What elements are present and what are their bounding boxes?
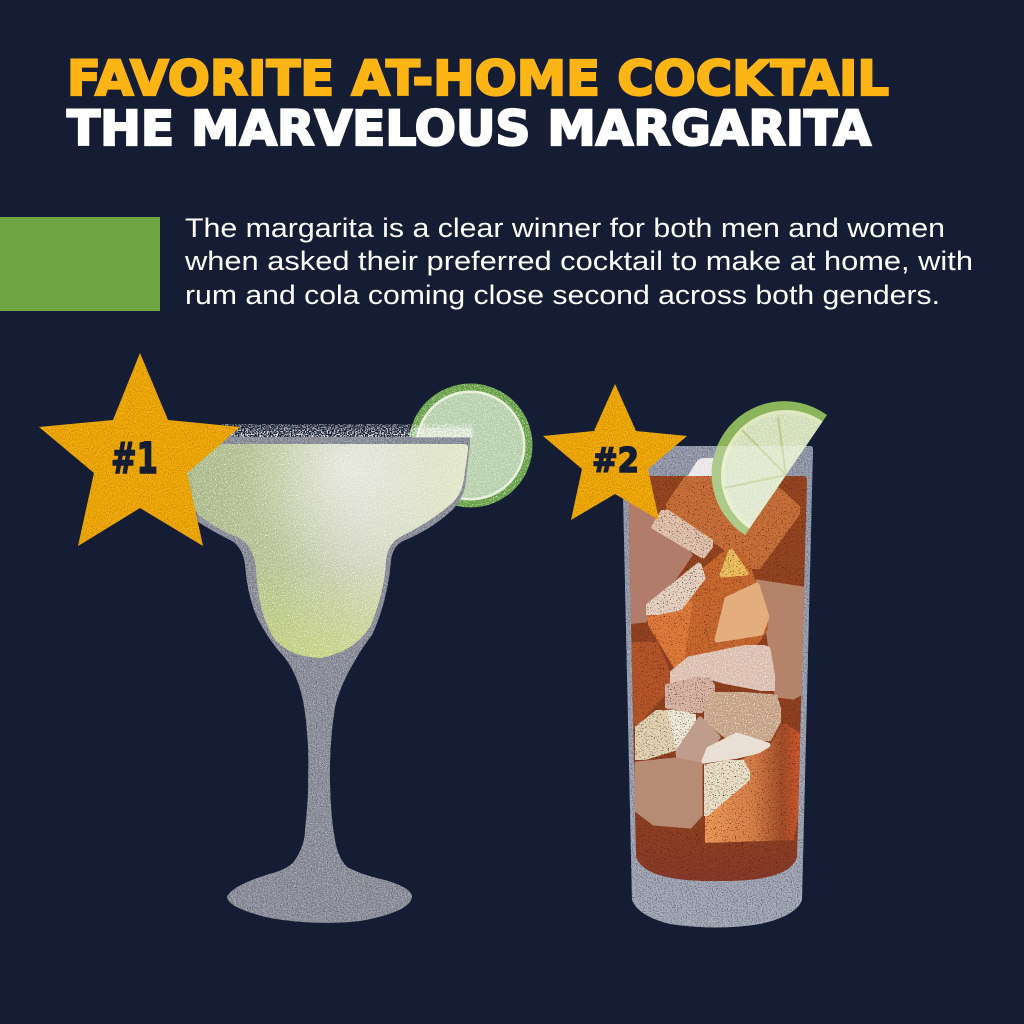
- lime wheel: [408, 384, 532, 508]
- pink left zone: [625, 500, 690, 622]
- green accent block: [0, 217, 160, 311]
- star badge #2: [543, 384, 687, 520]
- intro text: rum and cola coming close second across both genders.: [185, 280, 940, 310]
- star badge #1: #1: [111, 434, 158, 484]
- ice cap above liquid: [687, 458, 722, 477]
- upper pale cluster: [670, 645, 775, 691]
- lower cream cube: [704, 760, 750, 816]
- orange lower block: [705, 722, 801, 843]
- mid right brown: [757, 582, 810, 697]
- top orange ice: [666, 476, 800, 569]
- link cube: [678, 719, 718, 763]
- title: [67, 51, 889, 157]
- margarita illustration: [186, 384, 532, 923]
- salt rim: [222, 424, 472, 437]
- pale ice top-left: [646, 510, 713, 615]
- title line 2: THE MARVELOUS MARGARITA: [67, 101, 871, 157]
- intro text: when asked their preferred cocktail to make at home, with: [184, 246, 973, 276]
- intro text: [184, 213, 973, 310]
- tan cube: [704, 692, 781, 741]
- dark orange left: [631, 642, 670, 728]
- star badge #2: #2: [592, 441, 639, 481]
- cola base: [628, 476, 807, 881]
- bright white facet: [704, 735, 768, 761]
- central orange ice: [648, 549, 768, 673]
- peach highlight: [717, 585, 767, 640]
- cream cube: [635, 710, 696, 760]
- cola glass illustration: [623, 401, 827, 928]
- star badge #1: [39, 353, 240, 546]
- lime wedge: [712, 401, 827, 535]
- margarita liquid: [186, 444, 468, 658]
- bottom left brown block: [637, 760, 700, 826]
- speckled cube: [665, 677, 715, 713]
- glass body and stem: [190, 437, 470, 923]
- title line 1: FAVORITE AT-HOME COCKTAIL: [67, 51, 889, 107]
- salt over lime: [412, 428, 474, 438]
- rum and cola liquid with ice: [628, 476, 807, 881]
- tumbler glass: [622, 446, 813, 928]
- intro text: The margarita is a clear winner for both men and women: [185, 213, 945, 243]
